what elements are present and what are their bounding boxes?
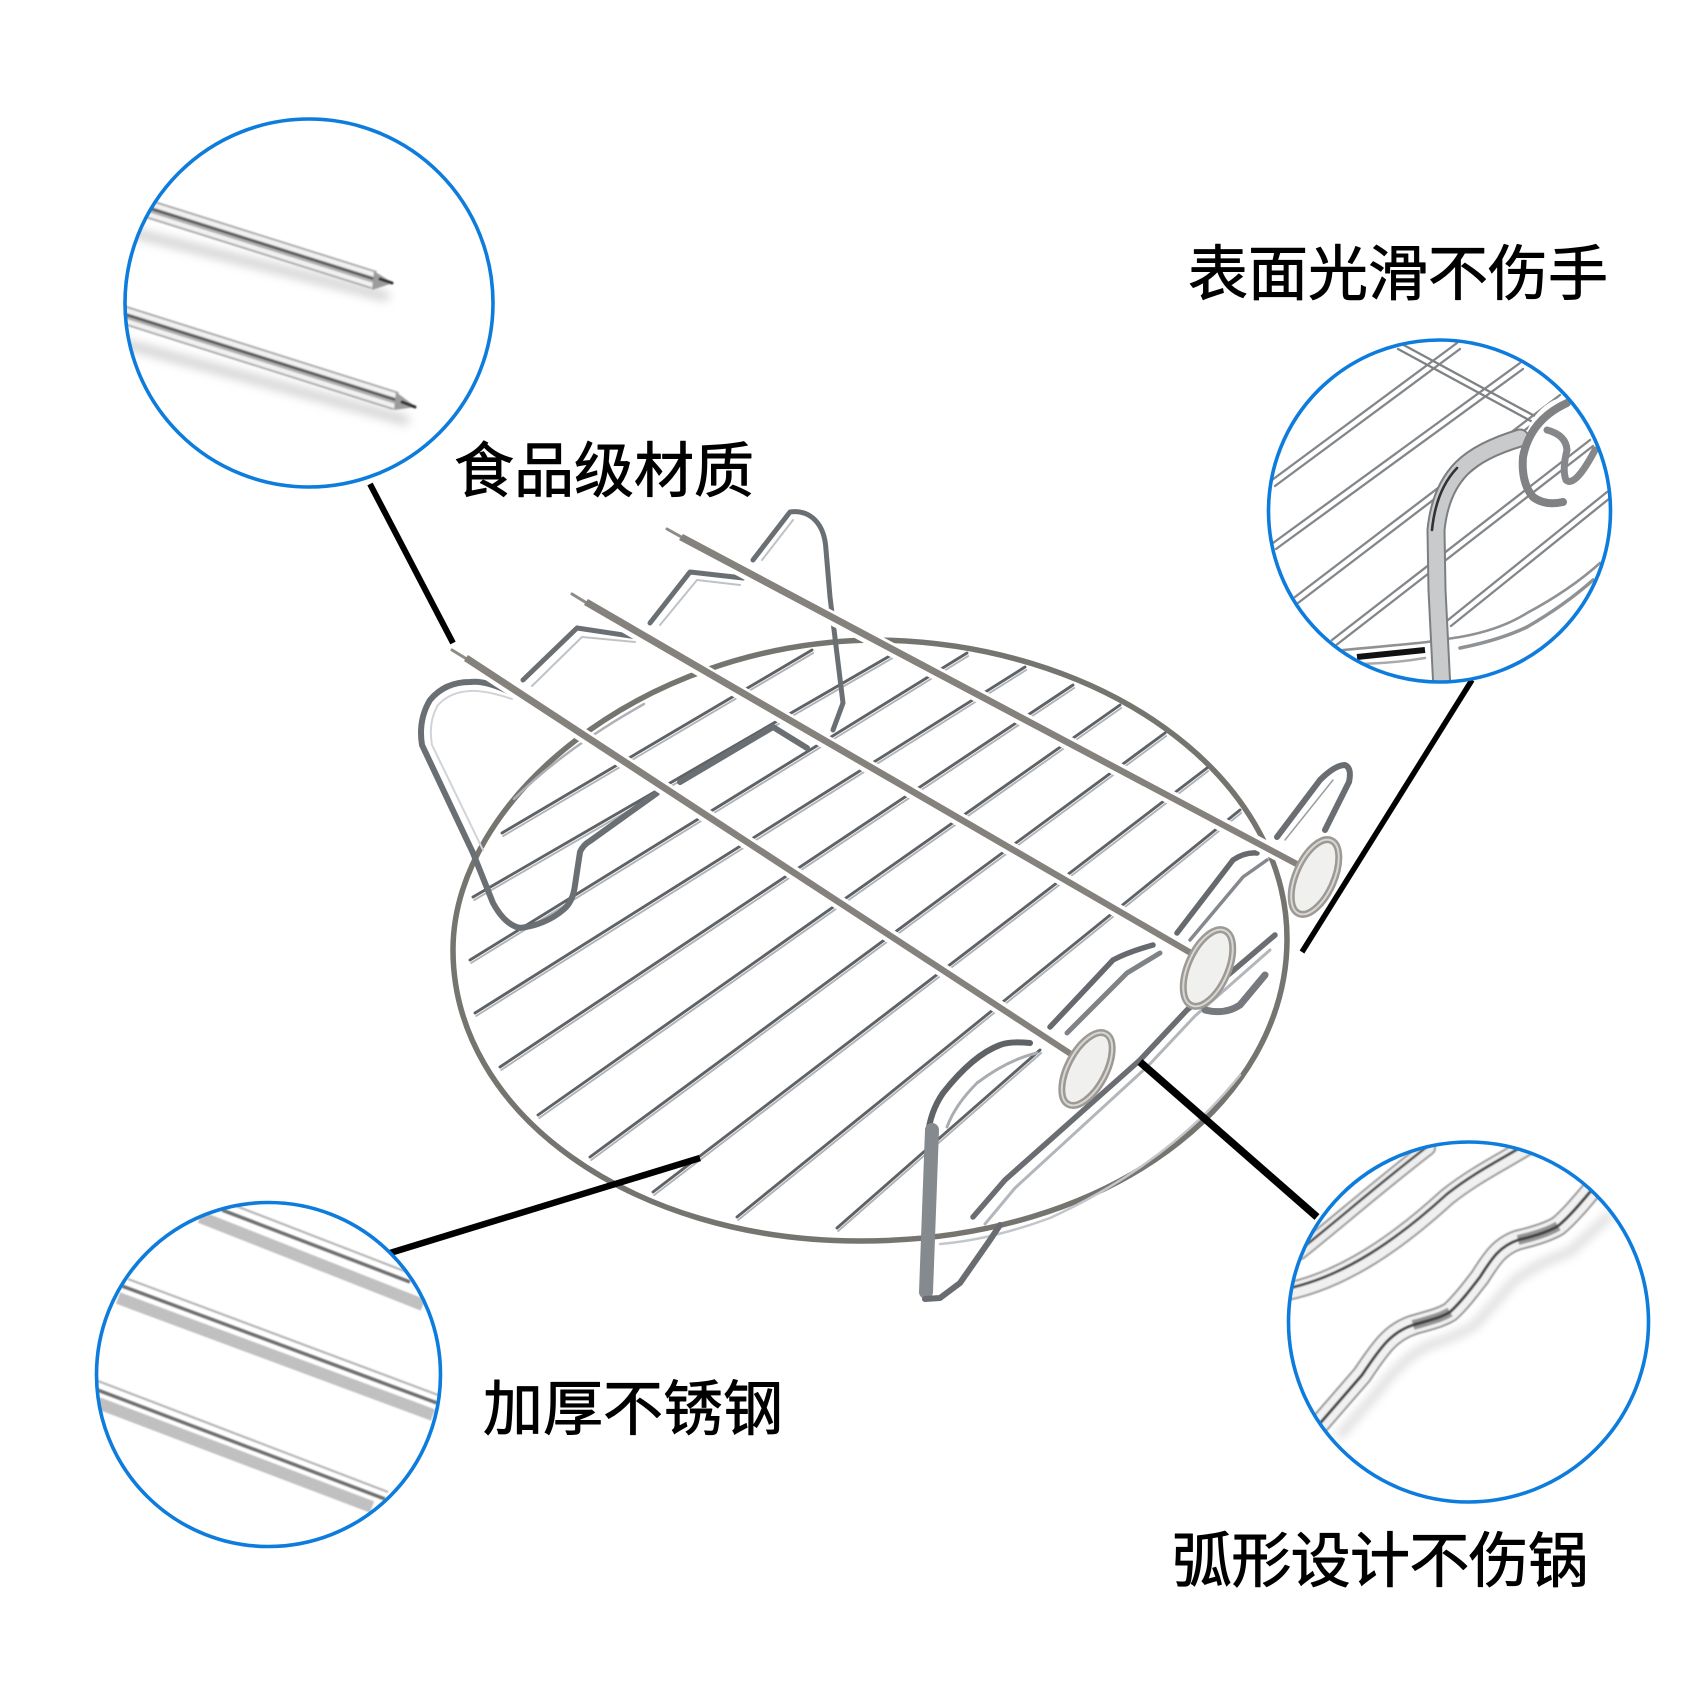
connector line: curved design — [1140, 1062, 1317, 1217]
label: food grade material: 食品级材质 — [454, 438, 754, 505]
circle border — [96, 1202, 440, 1546]
label: smooth surface: 表面光滑不伤手 — [1188, 241, 1608, 308]
circle border — [1268, 340, 1610, 682]
skewer 2 — [572, 594, 1204, 963]
hook close-up — [1272, 343, 1610, 690]
infographic canvas — [94, 117, 1650, 1588]
steel wires close-up — [95, 1206, 438, 1507]
skewer 3 — [667, 529, 1309, 873]
skewer white halos — [460, 535, 1308, 1058]
label: thickened stainless steel: 加厚不锈钢 — [483, 1376, 783, 1443]
rack grid wires — [470, 650, 1241, 1231]
label: curved design: 弧形设计不伤锅 — [1172, 1528, 1588, 1595]
detail circle: curved wire — [1285, 1142, 1648, 1502]
back legs — [421, 512, 843, 928]
detail circle: hook and wires — [1268, 340, 1610, 690]
skewer tips close-up — [108, 199, 416, 420]
connector line: smooth surface — [1302, 680, 1472, 952]
circle border — [125, 119, 493, 487]
far-right leg tab — [1277, 765, 1350, 840]
skewer 1 — [452, 650, 1078, 1061]
curved wire close-up — [1285, 1143, 1610, 1435]
product: round air fryer rack with skewers — [421, 512, 1350, 1299]
upper-right leg — [1177, 853, 1267, 940]
front leg — [925, 935, 1275, 1299]
skewer loop handles — [1051, 833, 1349, 1113]
detail circle: thick steel wires — [95, 1202, 440, 1546]
connector line: food grade — [370, 484, 453, 643]
detail circle: skewer tips — [108, 119, 493, 487]
connector line: thick steel — [390, 1158, 700, 1253]
middle leg — [1050, 945, 1160, 1033]
circle border — [1288, 1142, 1648, 1502]
rack outer ring — [453, 640, 1287, 1244]
